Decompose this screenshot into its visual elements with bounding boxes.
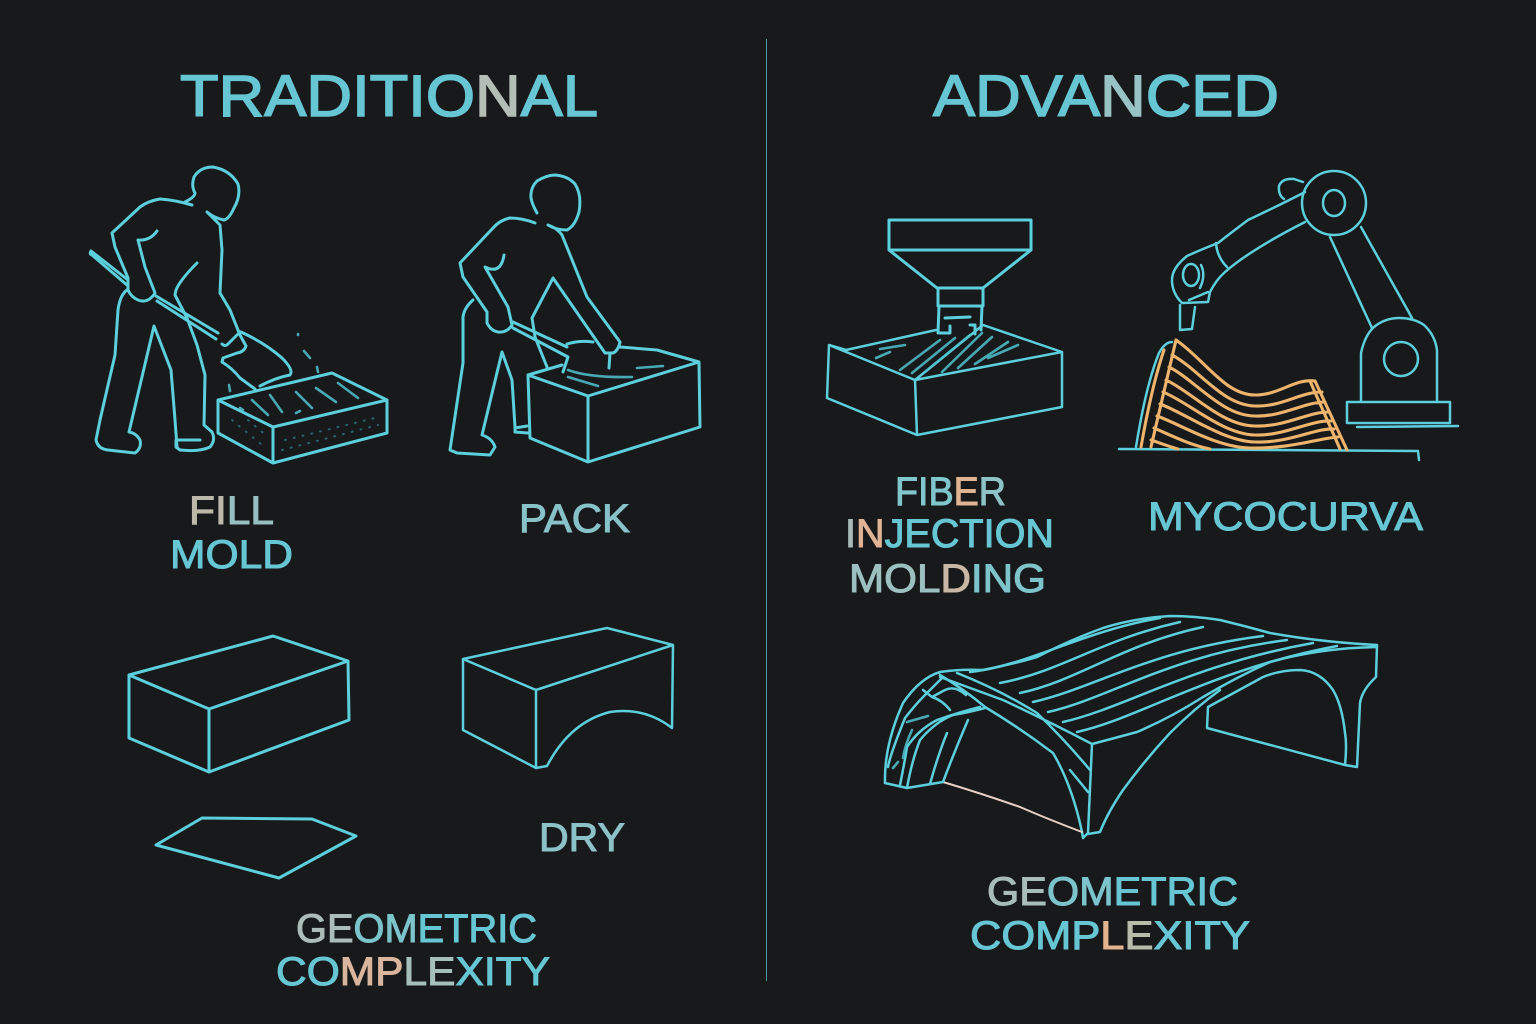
icon: block with arched cut (463, 628, 673, 768)
label: geometric complexity (traditional): GEOMETRIC (296, 907, 537, 951)
worker figure (96, 167, 255, 453)
label: geometric complexity (advanced): COMP LEXITY (970, 914, 1250, 958)
mold box (827, 325, 1062, 435)
label: geometric complexity (advanced): GEOMETRIC (987, 870, 1238, 914)
heading: traditional: TRADITIO NAL (180, 64, 598, 129)
icon: solid block (129, 636, 349, 772)
label: fiber injection molding: FIBER (895, 470, 1006, 514)
tamper handle (513, 322, 610, 372)
illustration: worker packing mold (450, 175, 700, 462)
hopper and nozzle (889, 220, 1031, 334)
illustration: robot arm printing curved structure (1119, 171, 1458, 460)
label: pack: PACK (519, 497, 630, 541)
worker figure (450, 175, 620, 455)
robot arm (1172, 179, 1458, 427)
shovel (90, 251, 291, 386)
printed wave structure (1136, 342, 1172, 447)
label: fiber injection molding (845, 470, 1054, 601)
mix marks (568, 366, 663, 386)
label: fiber injection molding: MOLDING (849, 557, 1046, 601)
arch end ribs (888, 677, 985, 788)
panel: advanced (827, 64, 1458, 958)
underside edge (943, 782, 1082, 832)
label: fiber injection molding: INJECTION (845, 512, 1054, 556)
label: fill mold: FILL (189, 489, 274, 533)
illustration: vaulted ribbed shell (885, 616, 1377, 838)
label: dry: DRY (539, 816, 625, 860)
box mold (528, 347, 700, 462)
label: fill mold: MOLD (170, 533, 293, 577)
brick mold (218, 373, 387, 463)
heading: advanced: ADVANCED (933, 64, 1279, 129)
fiber hatching (876, 333, 1018, 373)
illustration: worker filling mold with shovel (90, 167, 387, 463)
roof ribs (970, 618, 1337, 732)
shell outline (885, 616, 1377, 838)
label: fill mold (170, 489, 293, 577)
label: mycocurva: MYCOCURVA (1148, 495, 1423, 539)
label: geometric complexity (traditional) (276, 907, 550, 994)
panel: traditional (90, 64, 700, 994)
front arch band (885, 673, 1092, 832)
label: geometric complexity (traditional): COMPLEXITY (276, 950, 550, 994)
label: geometric complexity (advanced) (970, 870, 1250, 958)
mix speckle on mold (229, 334, 358, 415)
ground line (1119, 449, 1419, 460)
icon: flat shape (156, 818, 356, 878)
illustration: fiber injection machine (827, 220, 1062, 435)
